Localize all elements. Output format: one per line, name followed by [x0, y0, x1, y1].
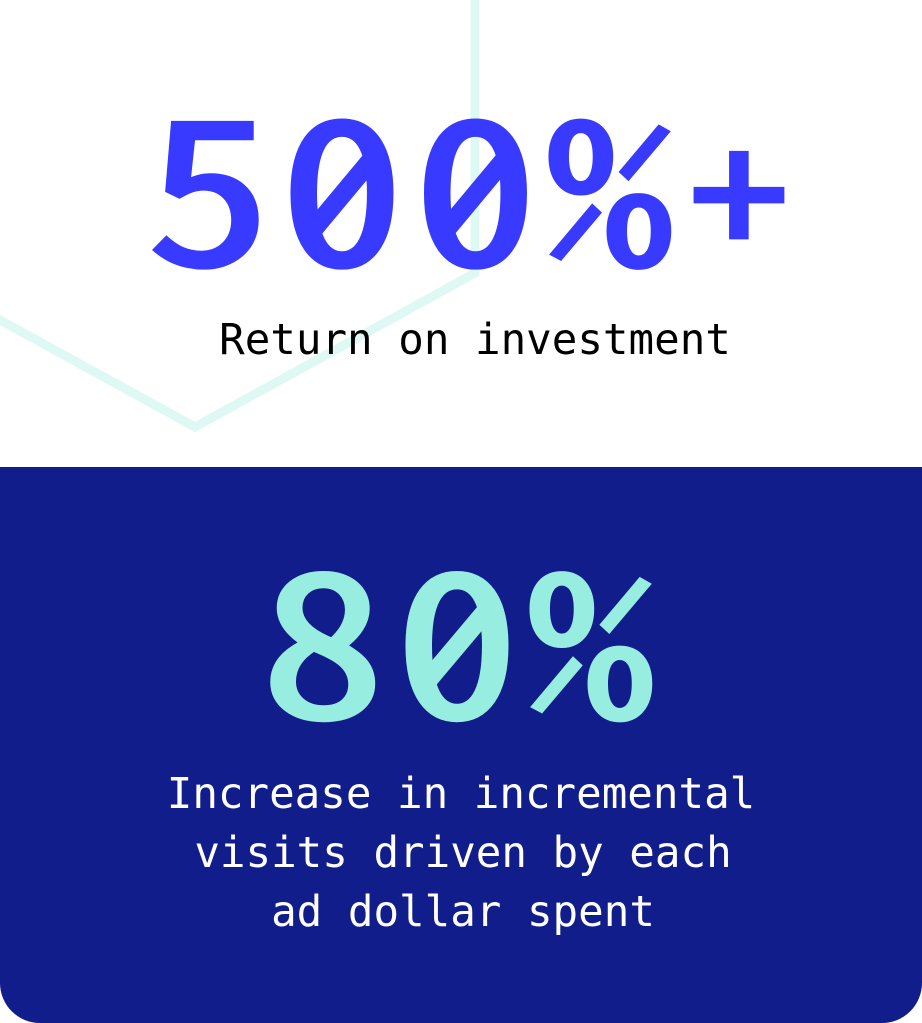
label: return on investment: Return on investment [219, 316, 731, 365]
description: incremental visits: ad dollar spent [271, 888, 655, 937]
stat: 500%+: + [692, 66, 786, 304]
decorative hexagon outline [0, 0, 475, 427]
panel: bottom navy [0, 467, 922, 1023]
description: incremental visits: visits driven by each [194, 829, 732, 878]
description: incremental visits [167, 770, 755, 937]
stat: 80%: 80% [260, 487, 654, 776]
stat: 500%+: 500% [146, 34, 673, 324]
description: incremental visits: Increase in incremental [167, 770, 755, 819]
